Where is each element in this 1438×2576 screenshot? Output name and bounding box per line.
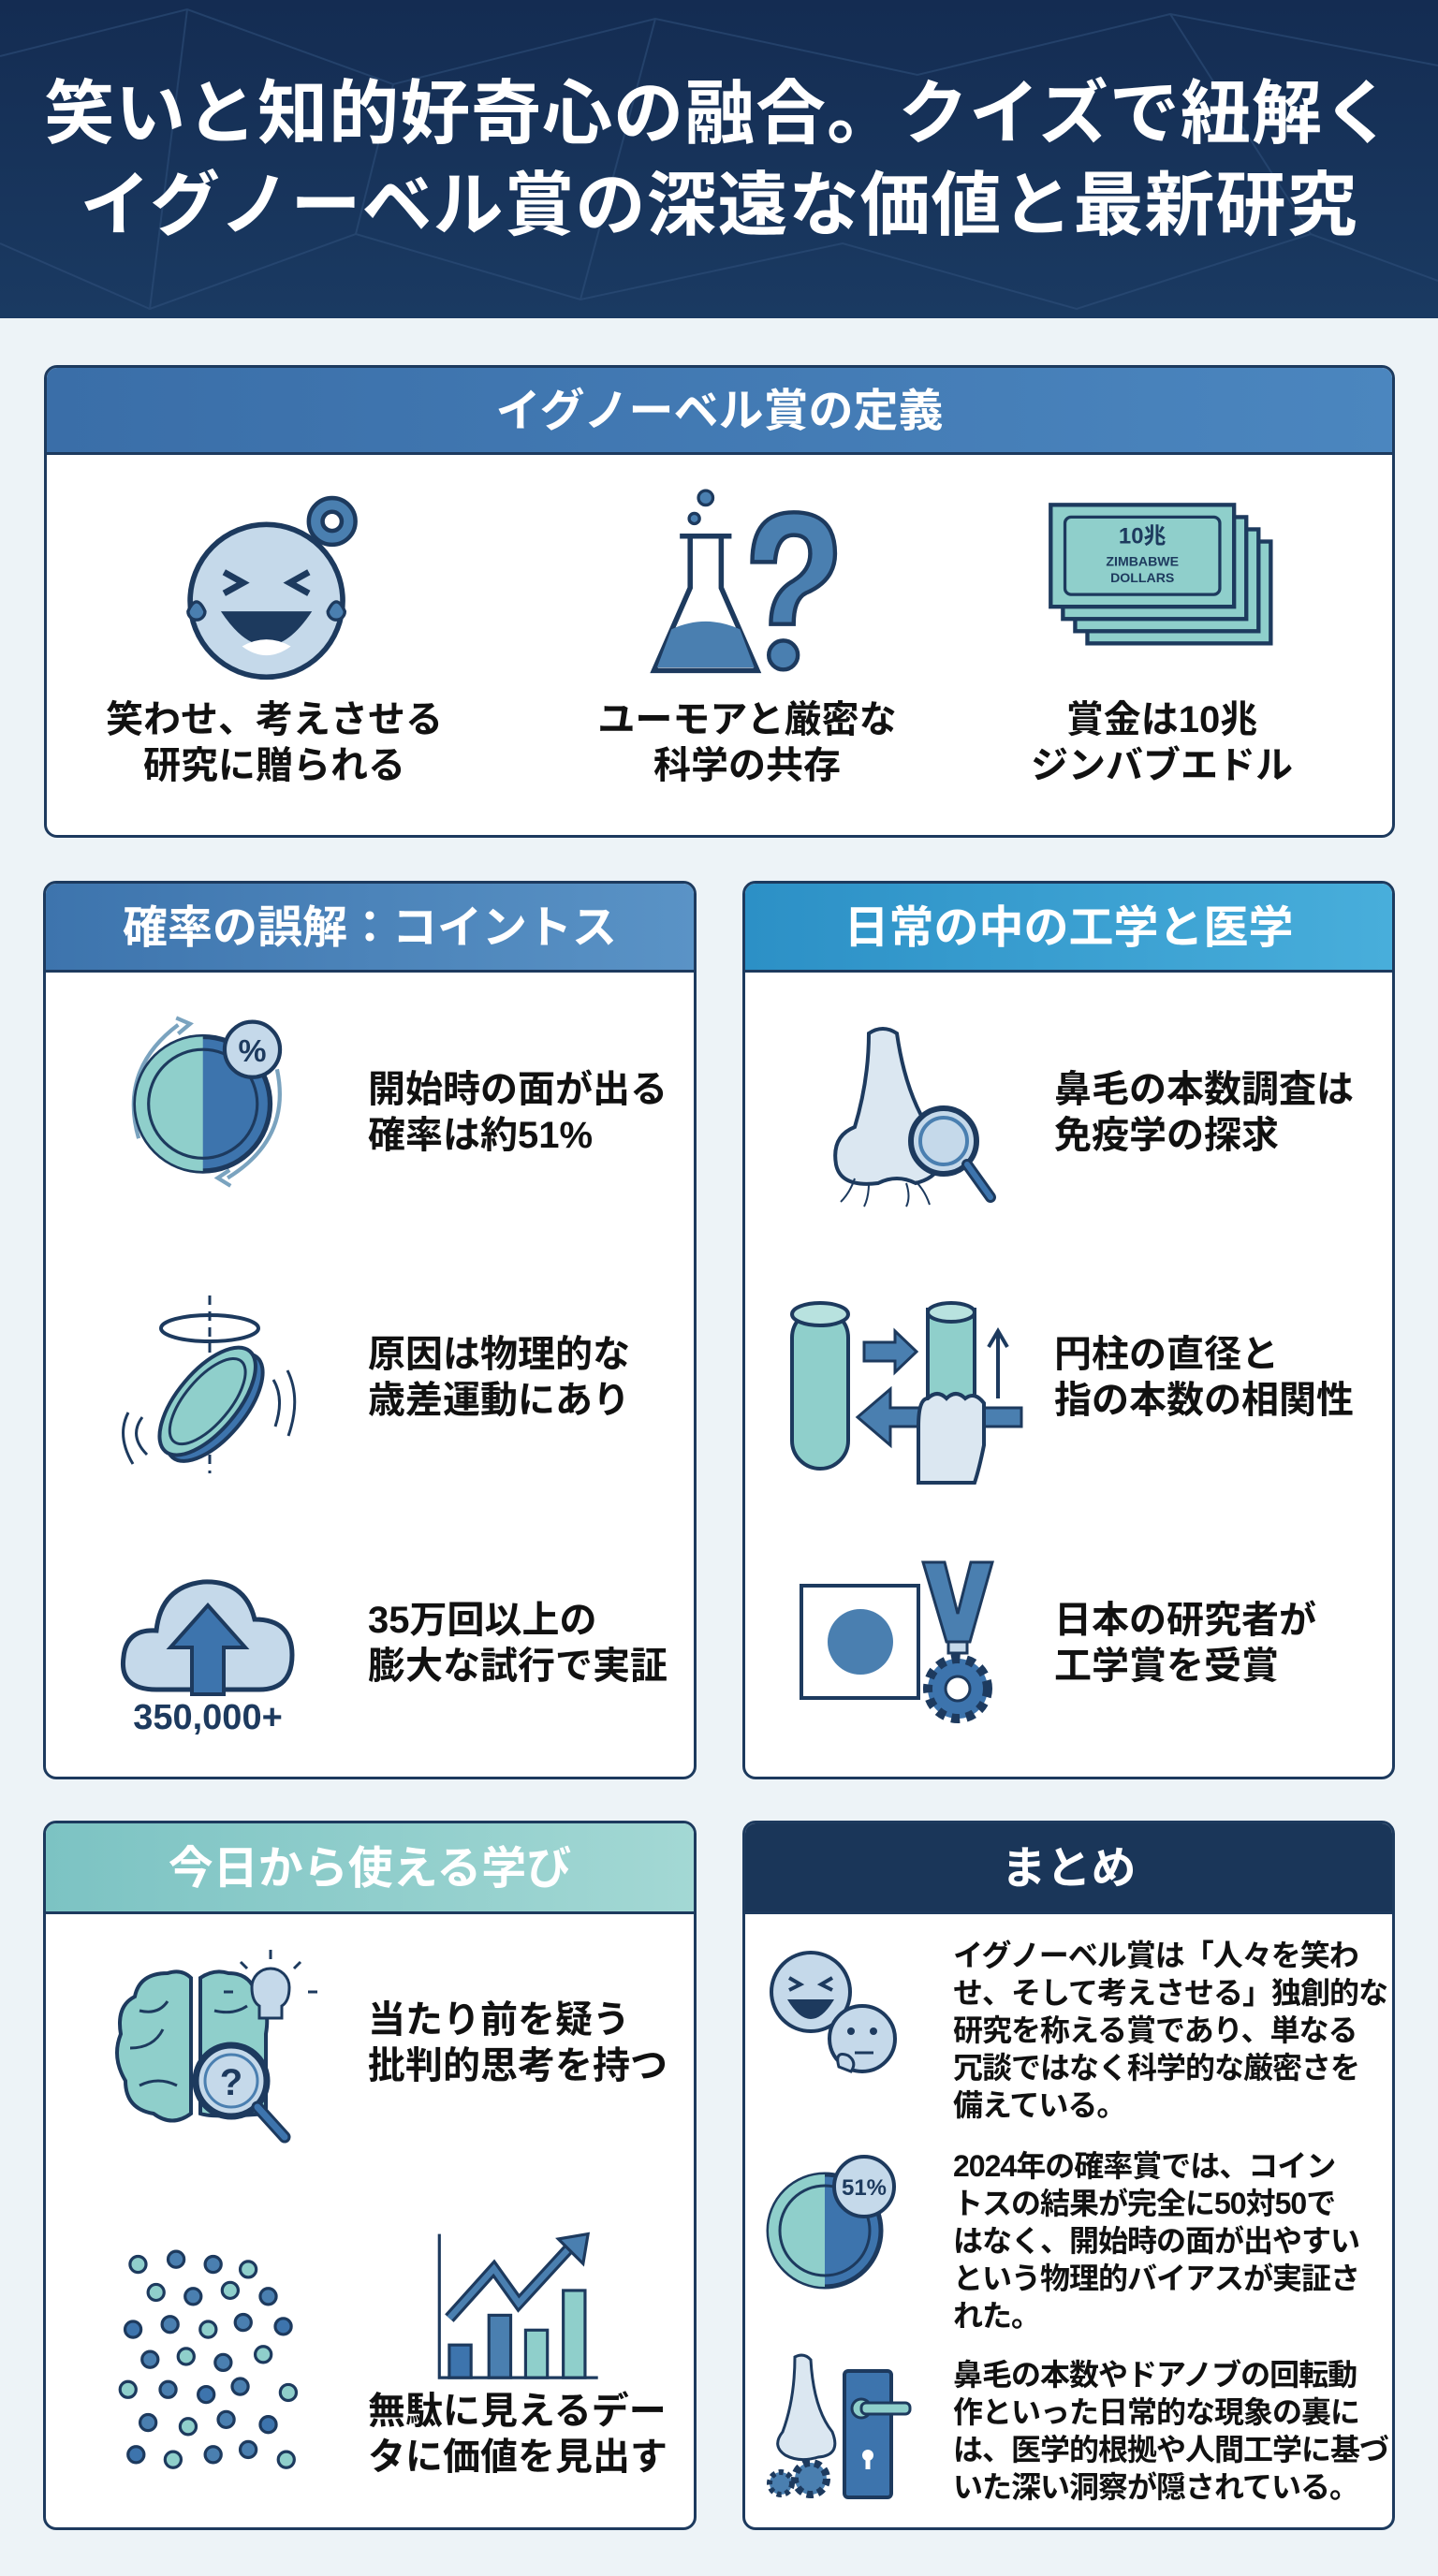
icon: cloud upload (120, 1579, 294, 1696)
text: summary 2 (953, 2149, 1359, 2333)
heading: coin toss (46, 884, 694, 973)
icon: laughing and thinking faces (770, 1951, 897, 2073)
icon: flask and question mark (650, 489, 837, 674)
icon: precessing coin (122, 1295, 296, 1473)
title: イグノーベル賞の深遠な価値と最新研究 (80, 166, 1357, 244)
panel: definition (44, 365, 1395, 838)
text: japanese winners: 工学賞を受賞 (1054, 1646, 1279, 1687)
text: prize money: 賞金は10兆 (1066, 699, 1257, 740)
text: summary 2: れた。 (953, 2299, 1040, 2333)
heading: definition: イグノーベル賞の定義 (495, 387, 944, 436)
icon: 51% coin (766, 2155, 896, 2290)
panel: coin toss (43, 881, 697, 1779)
panel: engineering and medicine (742, 881, 1395, 1779)
text: prize money (1031, 699, 1293, 786)
icon: nose with magnifier (833, 1027, 996, 1208)
text: 51%: 開始時の面が出る (368, 1069, 668, 1110)
text: humor and rigor: 科学の共存 (653, 745, 841, 786)
text: japanese winners (1054, 1600, 1316, 1687)
heading: summary (745, 1823, 1392, 1914)
text: critical thinking: 当たり前を疑う (368, 1999, 630, 2041)
text: summary 3: 鼻毛の本数やドアノブの回転動 (953, 2358, 1357, 2392)
heading: takeaways (46, 1823, 694, 1914)
text: precession: 歳差運動にあり (368, 1380, 630, 1421)
text: summary 2: はなく、開始時の面が出やすい (953, 2224, 1359, 2258)
text: 350k trials (368, 1600, 668, 1687)
icon: coin with percent: % (238, 1033, 267, 1069)
text: cylinder fingers: 指の本数の相関性 (1054, 1380, 1354, 1421)
icon: brain with magnifier: ? (220, 2062, 242, 2103)
icon: coin with percent (131, 1017, 283, 1188)
heading: takeaways: 今日から使える学び (169, 1844, 571, 1894)
text: japanese winners: 日本の研究者が (1054, 1600, 1316, 1641)
icon: cylinders and hand (790, 1301, 1022, 1485)
text: cylinder fingers (1054, 1334, 1354, 1421)
text: humor and rigor: ユーモアと厳密な (597, 699, 897, 740)
text: value in data: 無駄に見えるデー (368, 2391, 667, 2432)
text: humor and rigor (597, 699, 897, 786)
heading: coin toss: 確率の誤解：コイントス (123, 903, 617, 953)
header banner (0, 0, 1438, 318)
text: value in data (368, 2391, 668, 2478)
text: summary 1: イグノーベル賞は「人々を笑わ (953, 1939, 1358, 1972)
title (44, 74, 1394, 244)
text: summary 1: 冗談ではなく科学的な厳密さを (953, 2051, 1359, 2085)
text: summary 2: という物理的バイアスが実証さ (953, 2261, 1359, 2295)
text: summary 1 (953, 1939, 1387, 2122)
text: precession (368, 1334, 630, 1421)
text: summary 3: は、医学的根拠や人間工学に基づ (953, 2433, 1388, 2466)
text: nose hair (1054, 1069, 1354, 1156)
panel: takeaways (43, 1821, 697, 2530)
icon: japan flag and medal (800, 1561, 994, 1723)
text: summary 3: いた深い洞察が隠されている。 (953, 2470, 1358, 2504)
icon: laughing face with gear (186, 496, 358, 680)
text: critical thinking (368, 1999, 668, 2086)
icon: zimbabwe banknotes (1049, 503, 1273, 646)
text: laugh and think (106, 699, 443, 786)
text: laugh and think: 笑わせ、考えさせる (106, 699, 443, 740)
text: summary 2: 2024年の確率賞では、コイン (953, 2149, 1335, 2183)
icon: 51% coin: 51% (842, 2175, 887, 2201)
text: summary 1: 研究を称える賞であり、単なる (953, 2013, 1357, 2047)
text: summary 3 (953, 2358, 1388, 2504)
text: 350k trials: 膨大な試行で実証 (368, 1646, 668, 1687)
text: nose hair: 鼻毛の本数調査は (1054, 1069, 1354, 1110)
icon: zimbabwe banknotes: 10兆 (1119, 524, 1167, 549)
text: laugh and think: 研究に贈られる (143, 745, 405, 786)
text: 51% (368, 1069, 668, 1156)
text: summary 1: 備えている。 (953, 2088, 1125, 2122)
icon: nose, gears and door knob (767, 2353, 912, 2499)
heading: engineering and medicine: 日常の中の工学と医学 (844, 903, 1294, 953)
text: 51%: 確率は約51% (368, 1115, 593, 1156)
text: summary 3: 作といった日常的な現象の裏に (953, 2395, 1359, 2429)
title: 笑いと知的好奇心の融合。クイズで紐解く (44, 74, 1394, 153)
text: precession: 原因は物理的な (368, 1334, 630, 1375)
icon: scattered data dots (118, 2250, 298, 2469)
text: cylinder fingers: 円柱の直径と (1054, 1334, 1279, 1375)
text: summary 2: トスの結果が完全に50対50で (953, 2187, 1335, 2220)
heading: definition (47, 368, 1392, 455)
text: 350,000+: 350,000+ (133, 1698, 283, 1737)
icon: brain with magnifier (115, 1950, 317, 2144)
text: summary 1: せ、そして考えさせる」独創的な (953, 1976, 1387, 2010)
heading: engineering and medicine (745, 884, 1392, 973)
panel: summary (742, 1821, 1395, 2530)
heading: summary: まとめ (1001, 1844, 1137, 1894)
text: value in data: タに価値を見出す (368, 2437, 668, 2478)
text: prize money: ジンバブエドル (1031, 745, 1293, 786)
text: critical thinking: 批判的思考を持つ (368, 2045, 668, 2086)
icon: zimbabwe banknotes: DOLLARS (1110, 570, 1174, 585)
text: 350k trials: 35万回以上の (368, 1600, 597, 1641)
icon: rising bar chart (438, 2232, 598, 2379)
icon: zimbabwe banknotes: ZIMBABWE (1106, 554, 1179, 569)
text: nose hair: 免疫学の探求 (1054, 1115, 1279, 1156)
